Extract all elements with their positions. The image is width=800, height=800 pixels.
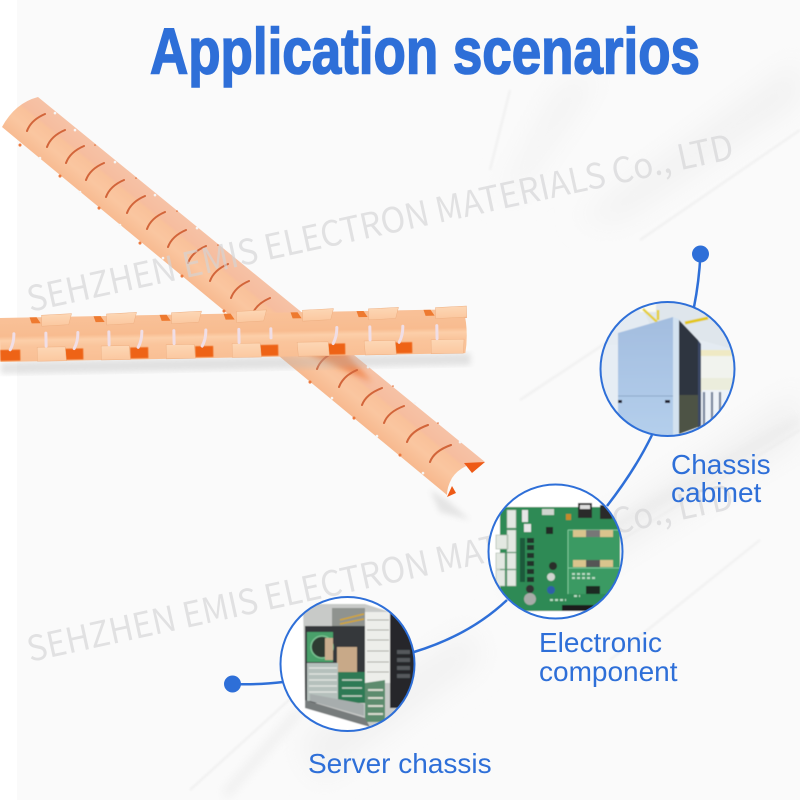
watermark: upper: SEHZHEN EMIS ELECTRON MATERIALS Co., LTD <box>21 119 738 323</box>
watermark: lower: SEHZHEN EMIS ELECTRON MATERIALS Co., LTD <box>21 469 738 673</box>
connector: left dot to server circle <box>232 682 283 684</box>
label: chassis cabinet: Chassis <box>671 449 771 480</box>
connector: cabinet circle to component circle <box>607 435 652 506</box>
copper strip: horizontal <box>0 306 471 374</box>
dot: top <box>692 246 709 262</box>
connector: component circle to server circle <box>414 600 507 652</box>
label: chassis cabinet: cabinet <box>671 477 762 508</box>
photo circle: chassis cabinet <box>600 302 736 436</box>
label: electronic component: component <box>539 656 678 687</box>
dot: left <box>224 676 241 692</box>
photo circle: electronic component <box>488 484 624 620</box>
connector: top dot to cabinet circle <box>694 254 700 307</box>
label: server chassis: Server chassis <box>308 748 492 779</box>
copper strip: diagonal <box>2 97 485 520</box>
photo circle: server chassis <box>280 597 416 733</box>
label: electronic component: Electronic <box>539 627 662 658</box>
